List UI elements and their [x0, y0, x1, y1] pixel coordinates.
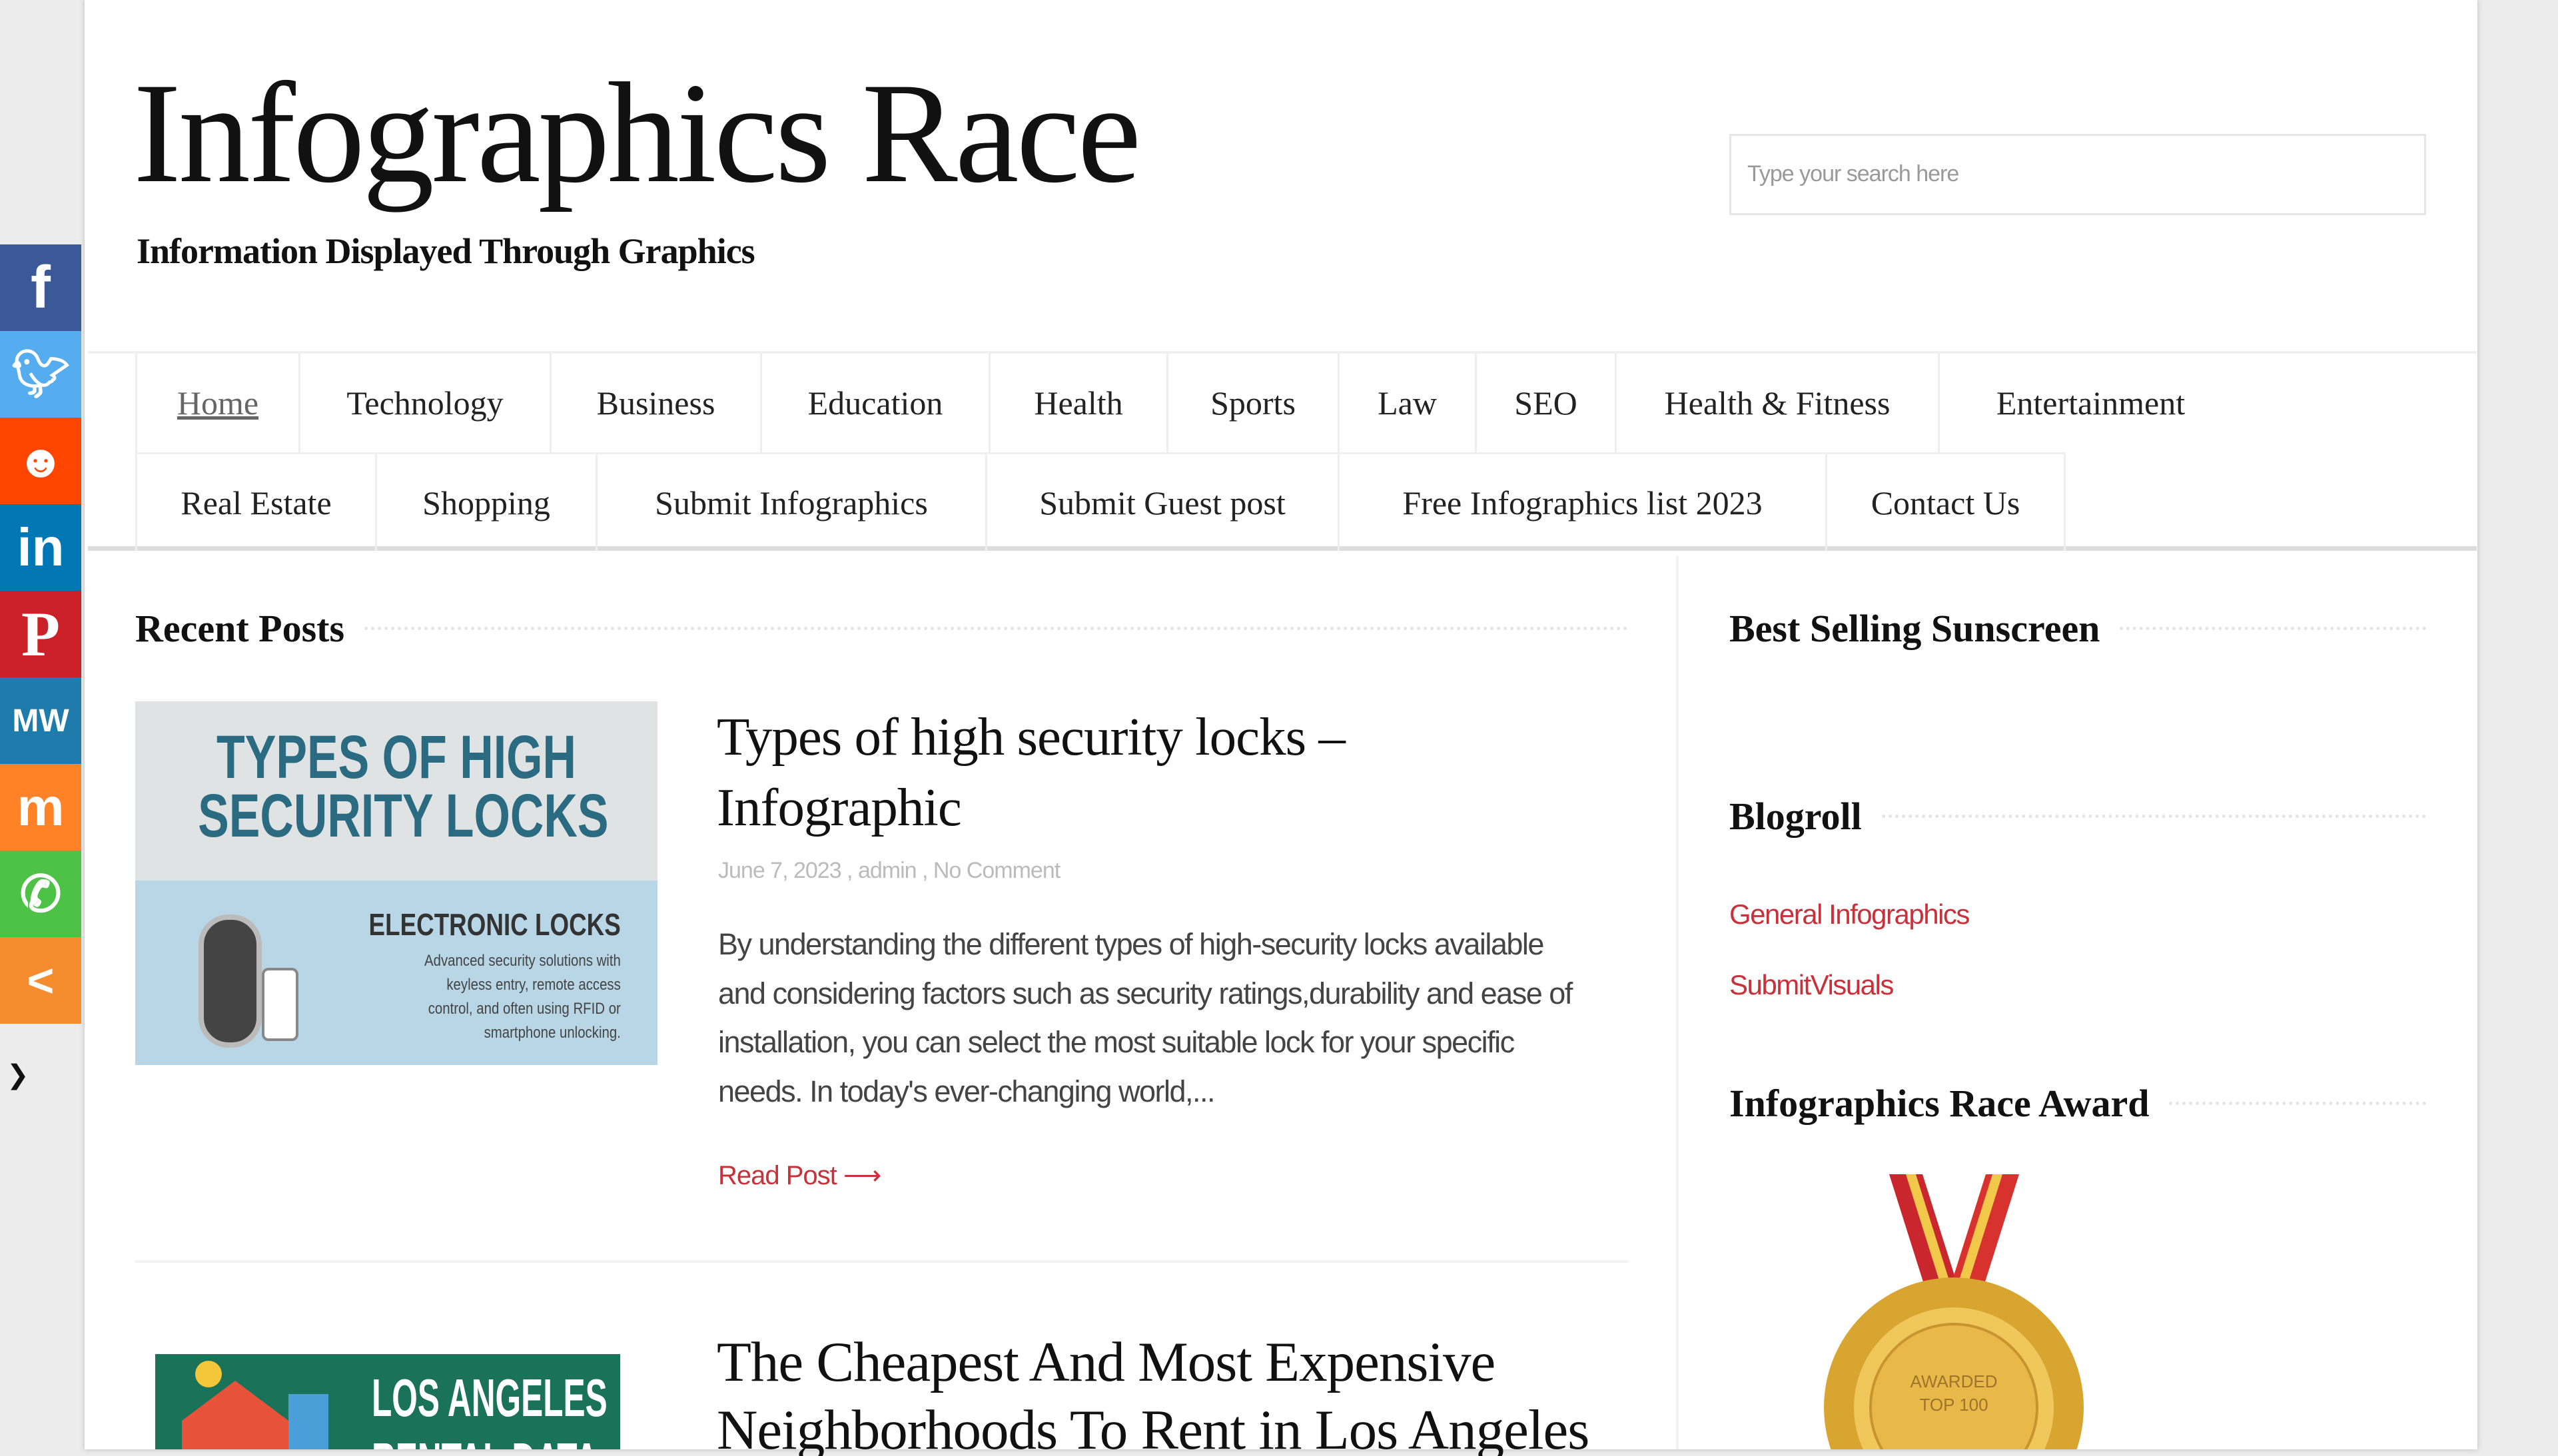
icon: twitter	[0, 331, 81, 418]
icon: mewe	[0, 677, 81, 764]
post 1 excerpt: needs. In today's ever-changing world,...	[718, 1074, 1214, 1108]
nav row 2	[135, 452, 2066, 551]
icon: mewe: MW	[12, 703, 69, 738]
icon: facebook: f	[31, 254, 51, 321]
icon: whatsapp: ✆	[20, 866, 61, 922]
post 1 image	[135, 701, 657, 1065]
post 1 excerpt: and considering factors such as security ratings,durability and ease of	[718, 976, 1572, 1010]
heading: recent posts	[135, 607, 1627, 650]
icon: houses	[182, 1381, 288, 1456]
post 1 title: Infographic	[717, 777, 961, 837]
tagline: Information Displayed Through Graphics	[137, 231, 755, 271]
icon: linkedin: in	[17, 518, 65, 577]
post 1 image: Advanced security solutions with	[424, 952, 621, 970]
read more link: Read Post ⟶	[718, 1161, 881, 1190]
icon: award medal	[1824, 1174, 2084, 1449]
icon: share	[0, 937, 81, 1024]
icon: facebook	[0, 244, 81, 331]
image title text: TYPES OF HIGH	[216, 723, 576, 791]
post 1 title	[717, 707, 1346, 837]
heading: recent posts: Recent Posts	[135, 607, 344, 650]
nav row 1: Sports	[1210, 384, 1296, 422]
nav row 1: Education	[808, 384, 943, 422]
social share bar	[0, 244, 81, 1024]
nav row 2: Submit Guest post	[1039, 484, 1286, 521]
post 1 title: Types of high security locks –	[717, 707, 1345, 767]
icon: reddit: ☻	[16, 435, 65, 487]
search box: Type your search here	[1747, 161, 1958, 186]
icon: share: <	[27, 954, 54, 1006]
post 1 image: keyless entry, remote access	[446, 976, 621, 994]
nav row 2: Shopping	[422, 484, 550, 521]
blogroll links: General Infographics	[1729, 899, 1969, 930]
nav row 1: Business	[597, 384, 715, 422]
post 1 image: control, and often using RFID or	[428, 1000, 621, 1018]
heading: blogroll	[1729, 795, 2425, 838]
nav row 2: Free Infographics list 2023	[1402, 484, 1763, 521]
icon: award medal: AWARDED	[1911, 1371, 1997, 1391]
icon: smart lock	[199, 914, 262, 1048]
nav row 1: Entertainment	[1996, 384, 2185, 422]
post 1 excerpt: installation, you can select the most suitable lock for your specific	[718, 1025, 1514, 1059]
blogroll links	[1729, 899, 1969, 1000]
icon: mix	[0, 764, 81, 851]
heading: best selling sunscreen: Best Selling Sunscreen	[1729, 607, 2100, 650]
nav row 1: SEO	[1514, 384, 1577, 422]
heading: best selling sunscreen	[1729, 607, 2426, 650]
icon: pinterest: P	[21, 599, 60, 669]
nav row 1: Health & Fitness	[1665, 384, 1890, 422]
post 1 meta: June 7, 2023 , admin , No Comment	[718, 858, 1060, 883]
icon: mix: m	[17, 777, 65, 837]
icon: reddit	[0, 418, 81, 504]
nav row 2: Contact Us	[1871, 484, 2020, 521]
nav row 1: Health	[1034, 384, 1123, 422]
nav row 1: Technology	[346, 384, 504, 422]
post 1 excerpt: By understanding the different types of high-security locks available	[718, 927, 1543, 961]
navigation menu	[88, 351, 2477, 551]
site title: Infographics Race	[133, 53, 1138, 212]
post 1 excerpt	[718, 927, 1573, 1108]
image title text: SECURITY LOCKS	[198, 782, 608, 850]
image title text	[198, 723, 608, 850]
heading: blogroll: Blogroll	[1729, 795, 1862, 838]
heading: award	[1729, 1082, 2426, 1125]
icon: award medal: TOP 100	[1919, 1395, 1988, 1415]
icon: whatsapp	[0, 851, 81, 937]
post 2 title	[717, 1331, 1589, 1456]
icon: collapse arrow: ❯	[7, 1060, 29, 1090]
blogroll links: SubmitVisuals	[1729, 969, 1893, 1000]
post 1 image: smartphone unlocking.	[484, 1024, 621, 1042]
nav row 2: Real Estate	[181, 484, 332, 521]
nav row 1: Home	[177, 384, 258, 422]
image title: LOS ANGELES	[372, 1368, 608, 1427]
post 2 image	[155, 1354, 620, 1449]
nav row 1: Law	[1378, 384, 1437, 422]
icon: twitter: 🐦︎	[11, 348, 70, 400]
sidebar divider	[1676, 556, 1679, 1449]
icon: linkedin	[0, 504, 81, 591]
search box	[1729, 134, 2426, 215]
post 2 title: The Cheapest And Most Expensive	[717, 1331, 1495, 1393]
heading: award: Infographics Race Award	[1729, 1082, 2149, 1125]
image subtitle: ELECTRONIC LOCKS	[369, 907, 621, 942]
icon: pinterest	[0, 591, 81, 677]
nav row 1	[135, 354, 2242, 452]
post divider	[135, 1260, 1628, 1263]
nav row 2: Submit Infographics	[655, 484, 928, 521]
